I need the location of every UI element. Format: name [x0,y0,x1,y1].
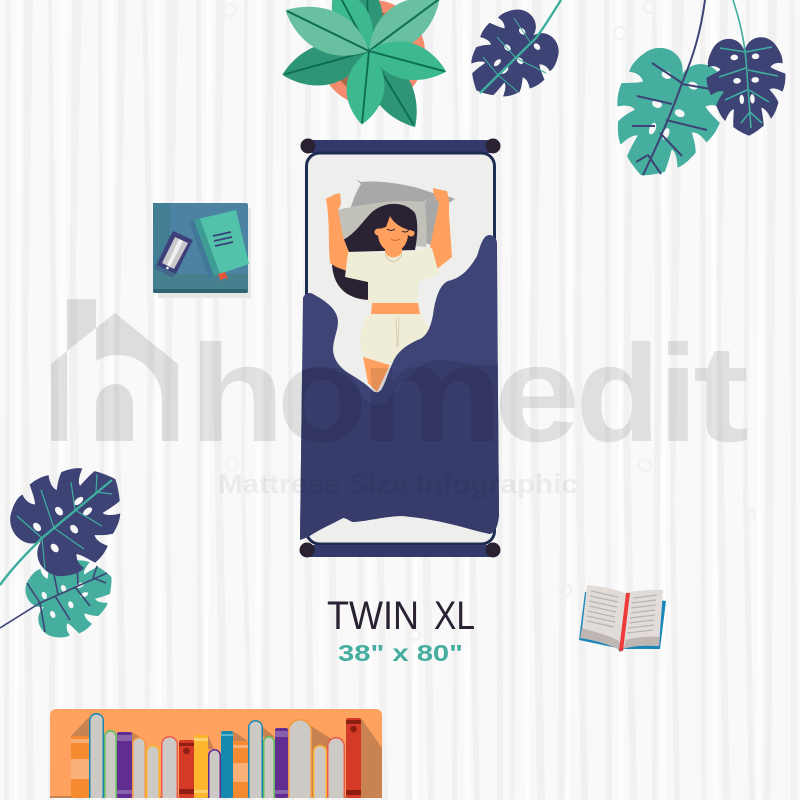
tablet body [153,203,248,293]
watermark logo [51,299,749,499]
icon: open book [579,585,666,652]
plant pot [319,0,425,106]
icon: phone [154,231,193,278]
book row [71,713,361,798]
tablet shadow [158,208,251,298]
left ear [374,228,382,236]
watermark wordmark: i [658,317,698,471]
necklace [385,255,402,262]
long hair [332,262,369,300]
plant leaves [276,0,451,137]
tablet with phone and notebook [153,203,251,298]
sleeping woman [326,179,455,392]
watermark wordmark [189,317,749,471]
right ear [408,230,414,236]
watermark wordmark: o [277,317,367,471]
midriff [371,303,420,314]
shorts [360,314,430,365]
smile [391,239,400,240]
neck [385,240,402,258]
t-shirt [345,248,439,303]
bed [295,138,505,558]
book shadows [50,717,382,798]
left leg [363,357,390,392]
tablet lower band [153,274,248,290]
drawstring [396,317,399,347]
face [378,216,408,252]
tablet left band [153,203,170,290]
shelf panel [50,709,382,798]
headboard post right [486,138,500,154]
title: twin xl: TWIN [327,594,419,638]
monstera leaf: navy top right [704,0,788,138]
monstera leaf: navy top centre [449,0,570,119]
watermark wordmark: h [189,317,285,471]
watermark wordmark: t [693,317,749,471]
pot soil [330,11,414,95]
house mark [51,299,178,441]
hair top [343,204,417,252]
mattress [306,153,494,544]
watermark wordmark: e [494,317,580,471]
headboard [307,140,493,153]
footboard post right [486,542,500,558]
fringe [379,211,416,232]
footboard [307,545,493,557]
monstera leaf: teal bottom left [0,542,127,647]
monstera leaf: teal top right [592,0,738,195]
front pillow [337,199,427,247]
monstera leaf: navy bottom left [0,440,148,590]
headboard post left [300,138,316,154]
tablet bottom edge [153,289,248,293]
title: twin xl [327,594,475,638]
watermark wordmark: d [576,317,660,471]
footboard post left [300,542,314,558]
bookshelf [50,709,382,798]
dimensions: 38" x 80" [338,640,463,666]
potted plant [276,0,451,137]
back pillow [350,179,455,247]
right arm [430,188,452,269]
blanket [295,235,505,545]
watermark wordmark: m [360,317,503,471]
icon: notebook [189,210,249,281]
watermark tagline: Mattress Size Infographic [218,469,578,499]
left arm [326,193,349,271]
closed eyes [387,229,408,232]
title: twin xl: XL [434,594,475,638]
